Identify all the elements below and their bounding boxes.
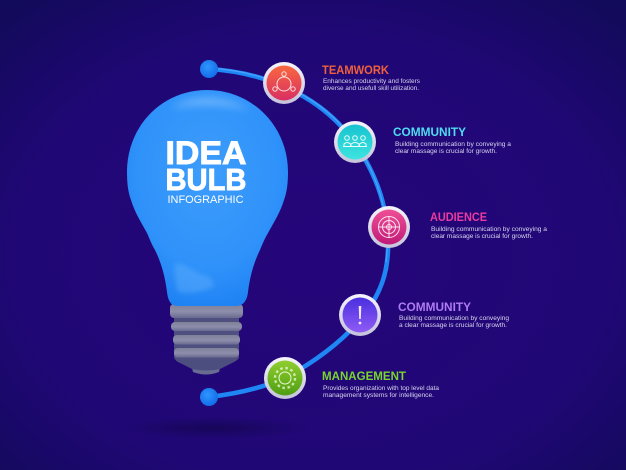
bulb title: INFOGRAPHIC <box>168 194 244 206</box>
text: community alert: Building communication by conveying <box>399 315 509 322</box>
icon: people <box>343 136 367 146</box>
text: community alert: a clear massage is crucial for growth. <box>399 322 507 329</box>
node: community alert <box>339 294 381 336</box>
node: management <box>264 357 306 399</box>
text: management: Provides organization with top level data <box>323 385 439 392</box>
text: community: Building communication by conveying a <box>395 141 511 148</box>
text: teamwork <box>322 65 420 92</box>
bulb title: IDEA <box>166 135 246 171</box>
floor shadow <box>118 417 308 439</box>
text: community alert: COMMUNITY <box>398 302 471 314</box>
text: management <box>322 371 439 399</box>
text: audience: clear massage is crucial for growth. <box>431 233 533 240</box>
text: community: COMMUNITY <box>393 127 466 139</box>
text: audience <box>430 212 547 240</box>
text: teamwork: TEAMWORK <box>322 65 390 77</box>
connecting arc <box>209 68 388 397</box>
text: management: MANAGEMENT <box>322 371 406 383</box>
bulb title: BULB <box>166 162 246 197</box>
icon: exclamation <box>359 306 361 324</box>
text: community <box>393 127 511 155</box>
text: audience: Building communication by conveying a <box>431 226 547 233</box>
arc end knob top <box>200 60 218 78</box>
text: audience: AUDIENCE <box>430 212 487 224</box>
icon: gear <box>275 368 295 388</box>
text: management: management systems for intelligence. <box>323 392 434 399</box>
node: community <box>334 121 376 163</box>
node: audience <box>368 206 410 248</box>
text: teamwork: Enhances productivity and fosters <box>323 78 420 85</box>
node: teamwork <box>263 62 305 104</box>
bulb screw base <box>170 304 243 374</box>
text: community alert <box>398 302 509 329</box>
text: community: clear massage is crucial for growth. <box>395 148 497 155</box>
text: teamwork: diverse and usefull skill utilization. <box>323 85 419 92</box>
bulb glass <box>127 90 288 306</box>
bulb title <box>166 135 246 206</box>
icon: team network <box>273 72 295 91</box>
arc end knob bottom <box>200 388 218 406</box>
lightbulb <box>127 90 288 374</box>
icon: target <box>378 216 400 238</box>
